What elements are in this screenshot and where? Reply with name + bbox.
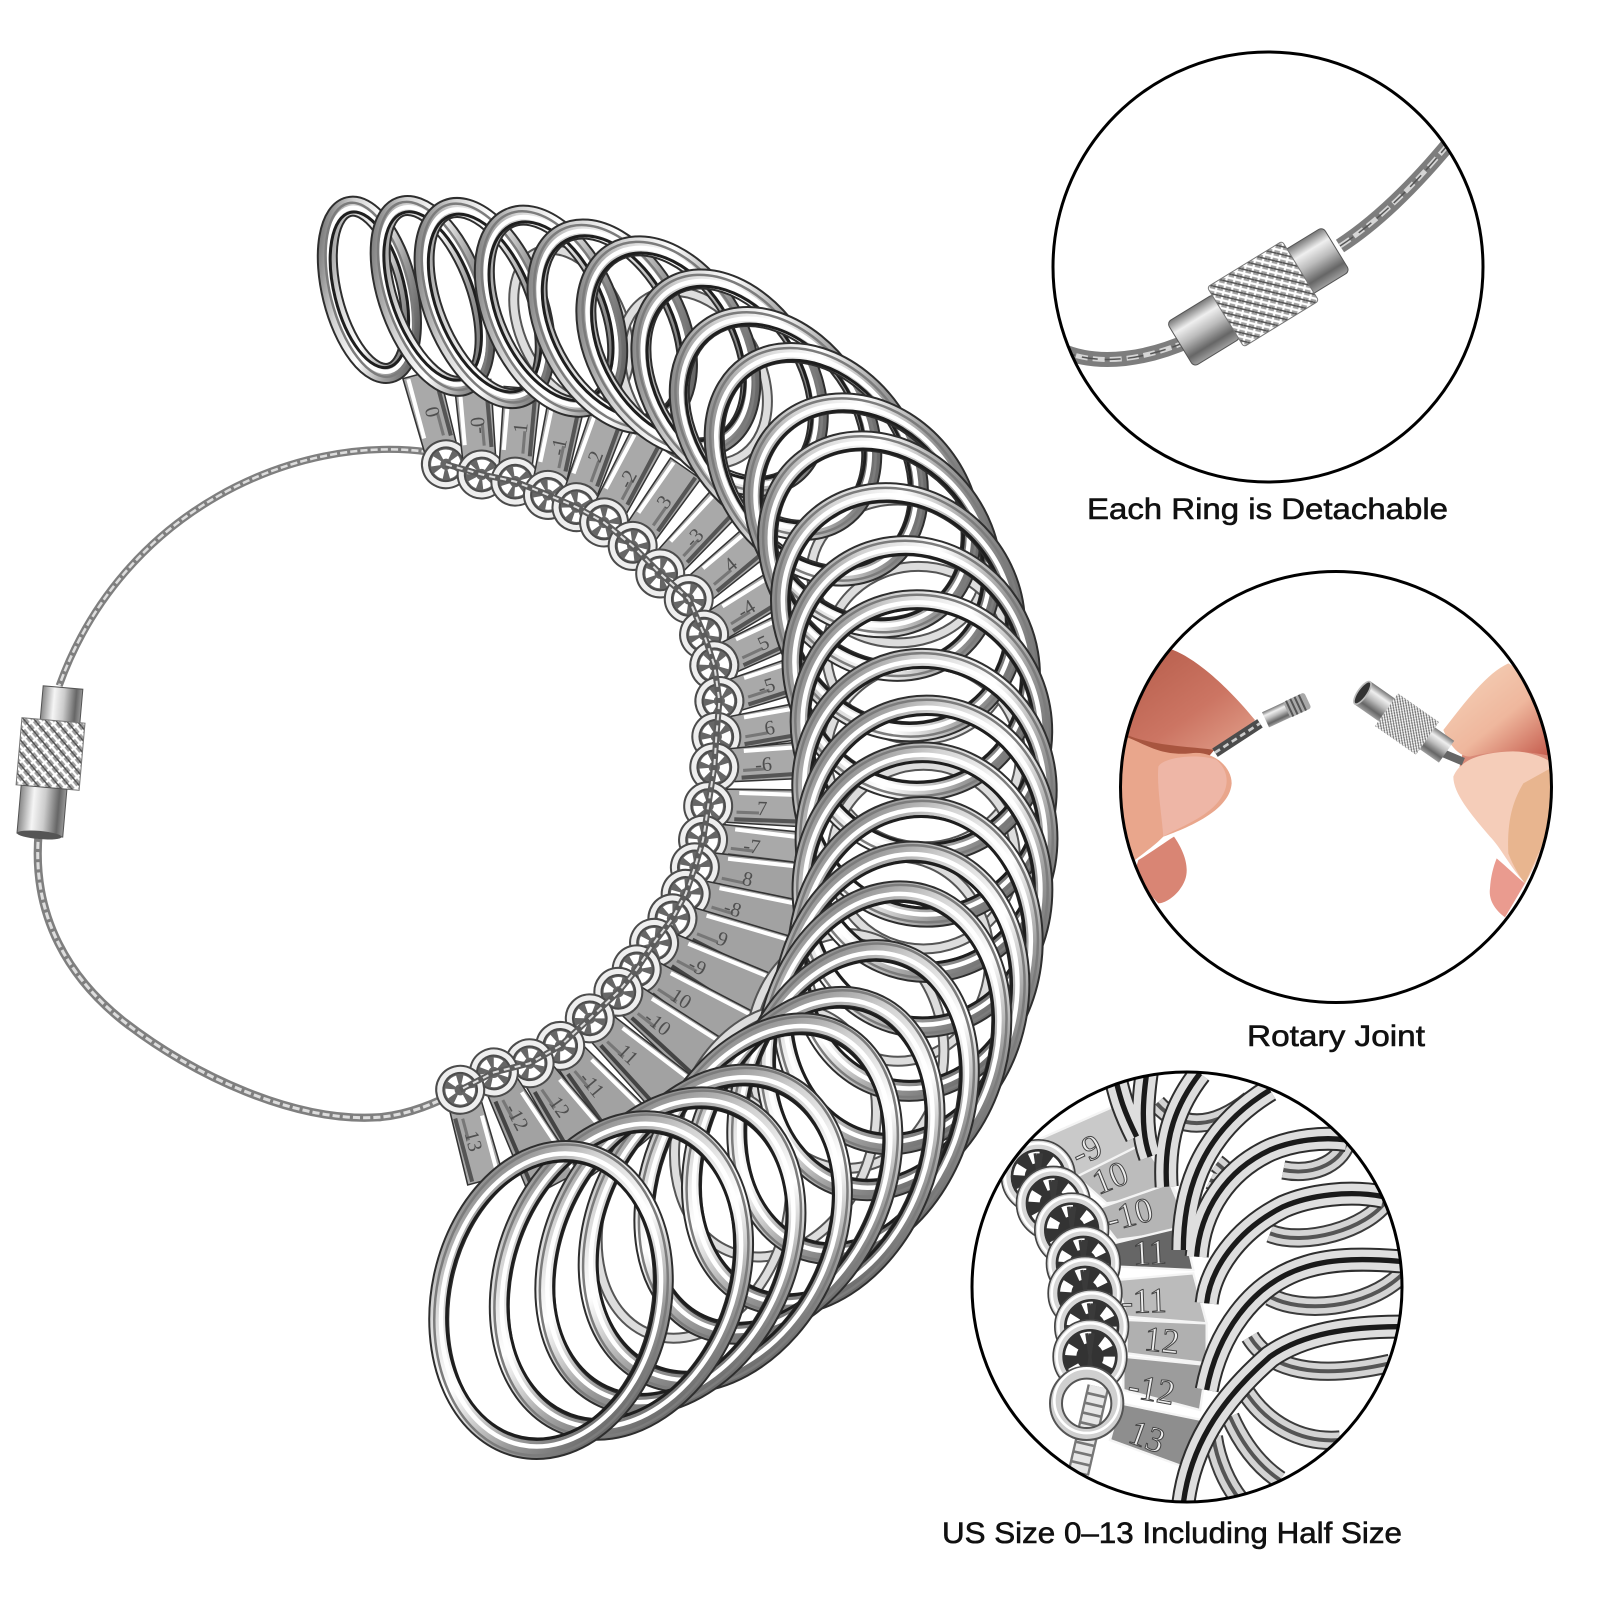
numbered size tabs with eyelets	[402, 368, 826, 1198]
caption: US Size 0–13 Including Half Size: US Size 0–13 Including Half Size	[942, 1517, 1402, 1550]
numbered size tabs with eyelets: 5	[755, 631, 773, 656]
icon: opened clasp socket	[1347, 674, 1458, 768]
engraved size numbers: -12	[1125, 1366, 1178, 1413]
icon: knurled screw clasp	[1162, 219, 1355, 375]
numbered size tabs with eyelets: -9	[684, 953, 710, 981]
numbered size tabs with eyelets: 13	[460, 1129, 486, 1154]
right fingers	[1443, 663, 1560, 917]
numbered size tabs with eyelets: 12	[544, 1093, 574, 1122]
caption: Rotary Joint: Rotary Joint	[1247, 1020, 1426, 1053]
cable threaded through the eyelets	[446, 464, 719, 1090]
engraved size numbers: 13	[1124, 1413, 1170, 1461]
photo of two hands holding the opened clasp	[1113, 649, 1560, 917]
numbered size tabs with eyelets: -11	[575, 1068, 608, 1102]
engraved size numbers: 12	[1142, 1319, 1181, 1362]
numbered size tabs with eyelets: 2	[584, 448, 608, 465]
eyelets	[1005, 1143, 1125, 1390]
numbered size tabs with eyelets: -3	[681, 524, 709, 552]
engraved size numbers: -11	[1121, 1281, 1167, 1321]
numbered size tabs with eyelets: -5	[755, 674, 778, 700]
numbered size tabs with eyelets: 3	[653, 492, 677, 513]
numbered size tabs with eyelets: -7	[742, 835, 762, 859]
numbered size tabs with eyelets: -8	[721, 896, 744, 922]
numbered size tabs with eyelets: 0	[421, 404, 445, 420]
size tabs	[1030, 1107, 1207, 1467]
panel: detachable clasp close-up	[1053, 52, 1483, 482]
engraved size numbers: 11	[1132, 1232, 1167, 1273]
engraved size numbers	[1065, 1126, 1181, 1461]
far-side rims seen through the stack	[491, 231, 1020, 1366]
numbered size tabs with eyelets: -12	[500, 1100, 533, 1135]
numbered size tabs with eyelets: 10	[666, 984, 695, 1014]
numbered size tabs with eyelets: 9	[713, 928, 731, 952]
panel: size tabs close-up	[972, 1072, 1403, 1503]
engraved size numbers: -10	[1102, 1190, 1157, 1239]
numbered size tabs with eyelets: -4	[733, 596, 760, 623]
circle outline	[1053, 52, 1483, 482]
numbered size tabs with eyelets: -10	[640, 1007, 675, 1041]
circle outline	[972, 1072, 1402, 1502]
caption: Each Ring is Detachable: Each Ring is Detachable	[1087, 493, 1448, 526]
engraved size numbers: -9	[1065, 1126, 1108, 1174]
cable in the close-up	[1060, 130, 1460, 359]
front eyelet with twisted cable	[1054, 1368, 1119, 1473]
main product: ring sizer set	[12, 186, 1084, 1477]
cable loop upper section	[59, 449, 429, 686]
numbered size tabs with eyelets: -1	[547, 436, 572, 457]
icon: threaded screw end	[1262, 692, 1311, 728]
stack of 27 metal sizing rings	[310, 186, 1084, 1477]
cable loop lower section	[38, 832, 460, 1118]
front ring arcs	[1117, 1073, 1403, 1503]
numbered size tabs with eyelets: -0	[467, 416, 490, 435]
screw clasp on the cable	[12, 684, 88, 842]
numbered size tabs with eyelets: 1	[510, 422, 533, 434]
engraved size numbers: 10	[1087, 1153, 1134, 1202]
numbered size tabs with eyelets: 4	[720, 553, 742, 577]
back ring arcs	[1157, 1100, 1403, 1500]
numbered size tabs with eyelets: 8	[740, 868, 755, 892]
numbered size tabs with eyelets: 11	[613, 1040, 642, 1070]
circle outline	[1120, 572, 1552, 1002]
numbered size tabs with eyelets: 7	[757, 798, 768, 820]
numbered size tabs with eyelets: 6	[763, 717, 777, 740]
panel: rotary joint close-up	[1113, 572, 1560, 1002]
left fingers	[1113, 649, 1255, 903]
numbered size tabs with eyelets: -2	[615, 467, 642, 492]
numbered size tabs with eyelets: -6	[754, 753, 773, 777]
